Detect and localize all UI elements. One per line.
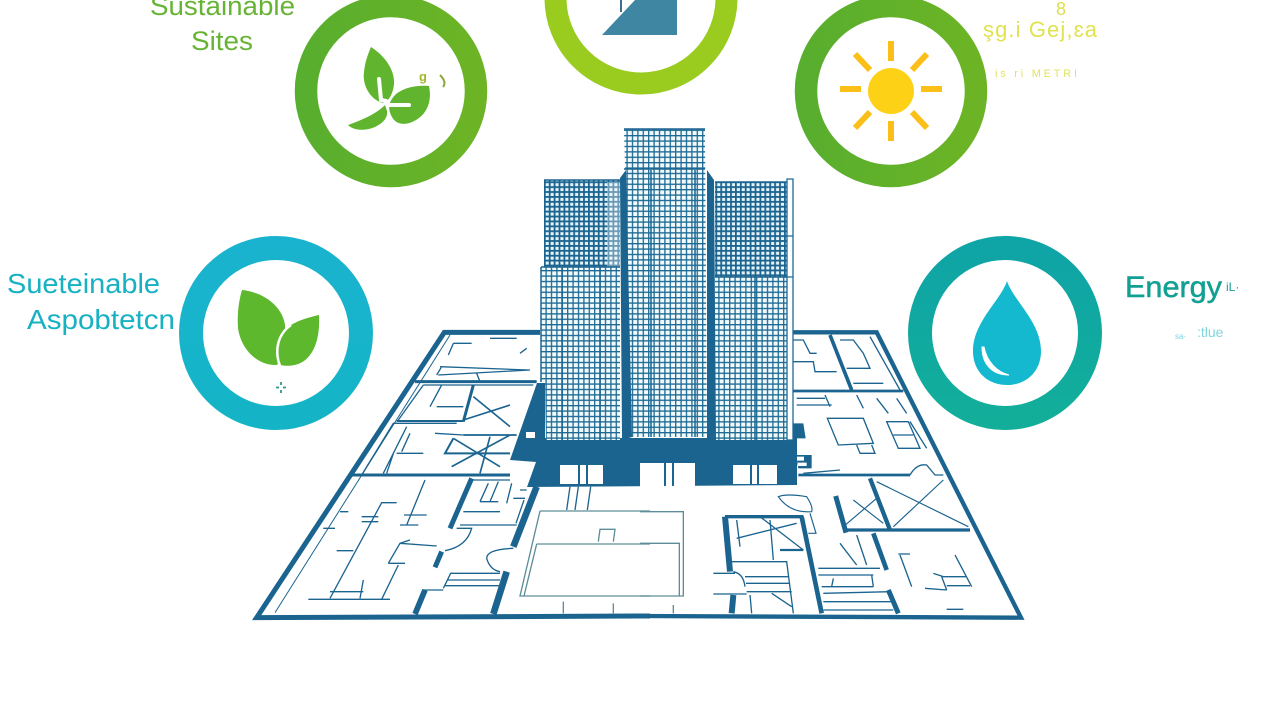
energy suffix: iL· xyxy=(1226,280,1239,294)
icon: water drop xyxy=(973,281,1041,385)
caption: energy small text xyxy=(1175,324,1224,341)
tower: right lower block xyxy=(715,277,787,440)
icon: small vent xyxy=(526,432,535,438)
tower: dark columns xyxy=(620,170,716,440)
heading line: sites: Sites xyxy=(191,26,253,56)
icon: sprout leaves xyxy=(348,47,430,130)
tower: left lower block xyxy=(541,267,620,440)
icon: base windows right xyxy=(733,465,777,484)
tower: block outlines xyxy=(541,129,787,440)
icon: sun rays xyxy=(840,41,942,141)
caption: yellow small text: is ri METRI xyxy=(995,68,1077,80)
icon: sun xyxy=(840,41,942,141)
tower: right strip xyxy=(787,179,793,440)
heading line: energy: Energy xyxy=(1125,271,1222,304)
floor plan: right half xyxy=(640,332,1021,618)
panel: water ring xyxy=(920,248,1090,418)
caption word: :tlue xyxy=(1197,324,1224,340)
heading line: aspobtetcn: Aspobtetcn xyxy=(27,304,175,335)
floor plan: left half xyxy=(257,332,650,618)
panel: sustainable sites ring xyxy=(306,6,476,176)
building tower xyxy=(541,129,793,440)
icon: two leaves xyxy=(238,290,319,393)
icon: roof slot xyxy=(620,0,622,12)
heading: aspiration label xyxy=(7,268,175,335)
heading: sustainable sites xyxy=(150,0,295,56)
icon: small garbled marks: g xyxy=(419,69,427,84)
tower: right upper block xyxy=(715,182,787,277)
icon: building roof shape xyxy=(602,0,677,35)
icon: small sparkle xyxy=(276,382,286,393)
panel: energy sun ring xyxy=(806,6,976,176)
icon: base windows left xyxy=(560,465,603,484)
icon: leaf vein xyxy=(277,325,291,366)
heading: energy label xyxy=(1125,271,1239,304)
floor plan xyxy=(257,332,1021,618)
heading line: sueteinable: Sueteinable xyxy=(7,268,160,299)
icon: small bracket xyxy=(440,75,444,87)
building base xyxy=(510,383,797,487)
tower: left upper block xyxy=(544,180,620,267)
icon: base opening centre xyxy=(640,463,695,487)
caption prefix: sa· xyxy=(1175,332,1186,341)
panel: aspiration ring xyxy=(191,248,361,418)
tower: left upper highlight xyxy=(607,182,620,267)
tower: centre block xyxy=(624,129,707,437)
panel: top centre ring xyxy=(556,0,726,84)
icon: drop highlight xyxy=(982,347,1009,375)
heading: yellow garbled label: şg.i Gej,ɛa xyxy=(983,17,1098,42)
